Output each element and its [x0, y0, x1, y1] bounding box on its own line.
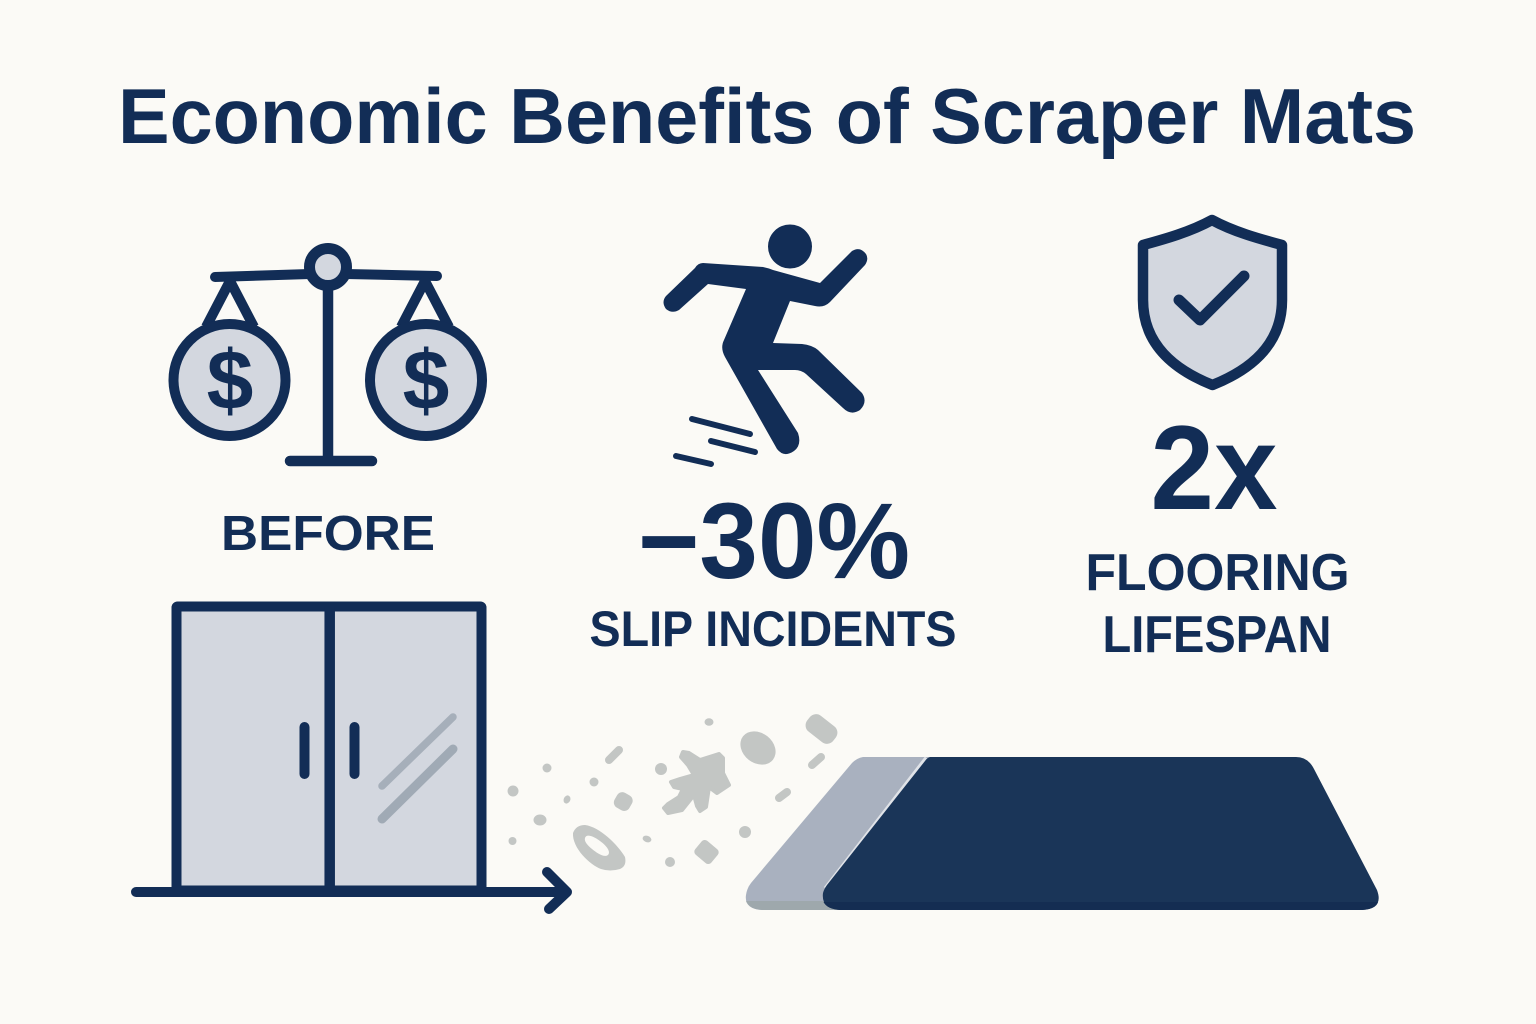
icon: balance scale with dollar coins: $: [403, 333, 449, 427]
label: flooring lifespan: LIFESPAN: [1102, 606, 1332, 664]
label: slip incidents: SLIP INCIDENTS: [590, 601, 956, 657]
label: before: BEFORE: [221, 507, 435, 561]
icon: glass double door: [176, 606, 482, 890]
label: flooring lifespan: [1086, 544, 1350, 664]
icon: scraper mat: [746, 757, 1379, 910]
icon: balance scale with dollar coins: [174, 248, 482, 461]
icon: balance scale with dollar coins: $: [207, 333, 253, 427]
arrow: floor line to mat: [136, 872, 567, 909]
label: flooring lifespan: FLOORING: [1086, 544, 1350, 602]
title: Economic Benefits of Scraper Mats: [118, 72, 1416, 160]
debris particles: [508, 711, 841, 870]
icon: falling person: [664, 224, 867, 464]
stat: minus 30 percent: −30%: [638, 480, 910, 601]
stat: 2x: 2x: [1150, 401, 1278, 535]
icon: shield with check: [1143, 220, 1282, 385]
